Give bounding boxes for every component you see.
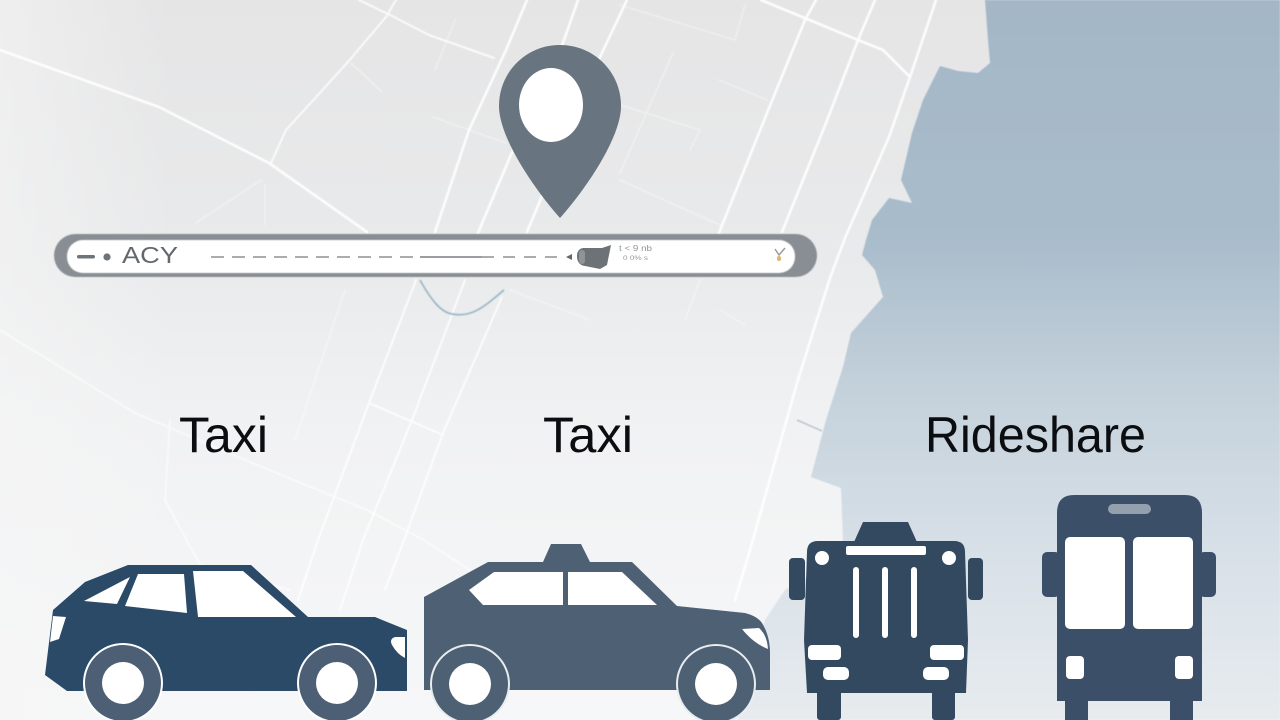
- bar inner panel: [67, 240, 795, 273]
- route curve under the search bar: [420, 280, 504, 315]
- icon: taxi: [424, 544, 770, 720]
- coastal inlet mark: [797, 420, 822, 431]
- left mirror: [789, 558, 805, 600]
- bus body: [1057, 495, 1202, 701]
- taxi front wheel: [676, 644, 756, 720]
- bus right mirror: [1199, 552, 1216, 597]
- car tail light: [50, 616, 66, 642]
- label: Taxi: Taxi: [179, 407, 268, 463]
- right wheel: [932, 690, 955, 720]
- trip details: [619, 244, 653, 262]
- front-view body: [804, 541, 968, 693]
- route progress bar: [54, 234, 817, 277]
- bus right wheel: [1170, 698, 1193, 720]
- bus windows and lights: [1065, 537, 1193, 679]
- right mirror: [968, 558, 983, 600]
- car headlight: [391, 637, 405, 658]
- map background: water: [738, 0, 1280, 720]
- car rear wheel: [83, 643, 163, 720]
- label: Taxi: Taxi: [543, 407, 633, 463]
- bar frame: [54, 234, 817, 277]
- label: Rideshare: Rideshare: [925, 407, 1146, 463]
- car front wheel: [297, 643, 377, 720]
- bus left mirror: [1042, 552, 1060, 597]
- icon: front-view taxi: [789, 522, 983, 720]
- car rear quarter window: [84, 577, 130, 604]
- bar start marks: [77, 253, 111, 261]
- dashed route line: [211, 256, 558, 258]
- car front window: [193, 571, 296, 617]
- trip details: t < 9 nb: [619, 244, 653, 253]
- icon: bar end mark: [775, 248, 785, 261]
- bus left wheel: [1065, 698, 1088, 720]
- taxi rear window: [469, 572, 563, 605]
- front-view details: [808, 546, 964, 680]
- left wheel: [817, 690, 841, 720]
- taxi front window: [568, 572, 657, 605]
- trip details: 0 0% s: [623, 256, 648, 262]
- bar label: ACY: [122, 242, 178, 268]
- map roads: [0, 0, 936, 610]
- icon: car: [45, 565, 407, 720]
- bus destination sign: [1108, 504, 1151, 514]
- car rear window: [125, 574, 187, 613]
- icon: bus: [1042, 495, 1216, 720]
- icon: small car on the route: [566, 245, 611, 269]
- taxi roof sign: [854, 522, 917, 542]
- taxi rear wheel: [430, 644, 510, 720]
- icon: location pin: [499, 45, 621, 218]
- taxi headlight: [742, 628, 768, 649]
